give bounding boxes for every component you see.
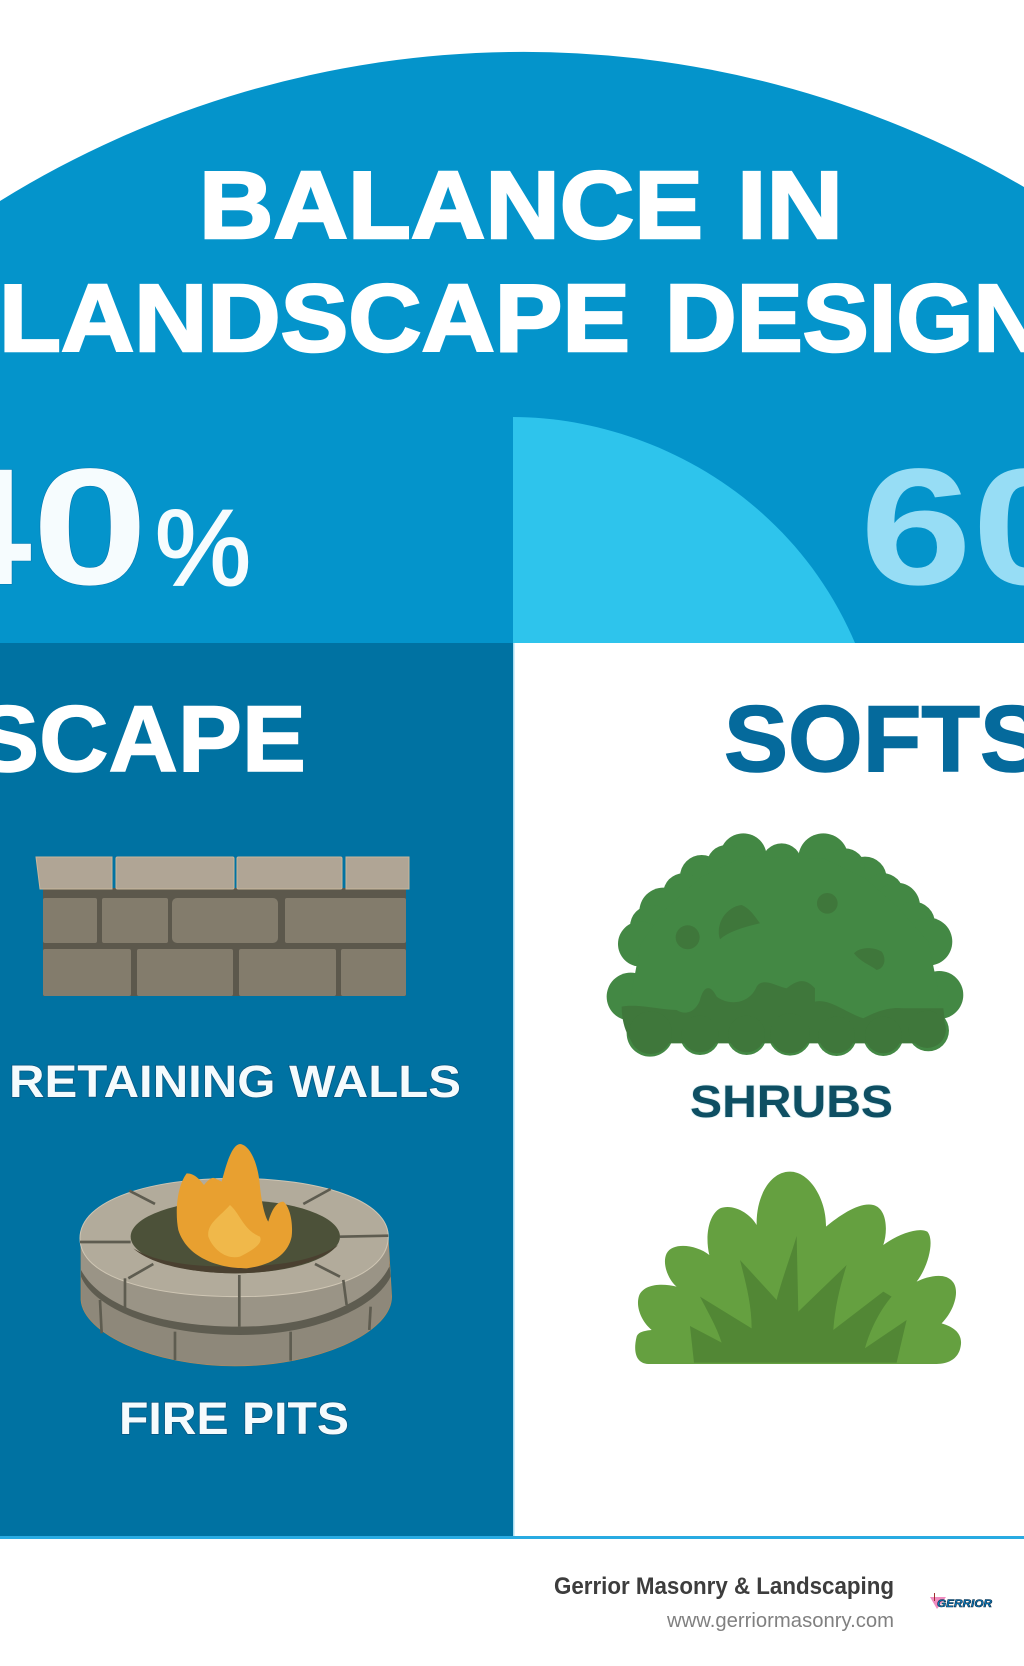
title xyxy=(0,152,1024,372)
footer xyxy=(554,1573,992,1632)
title: DESIGN xyxy=(665,265,1024,372)
stat: 40 percent xyxy=(0,435,251,620)
icon: retaining wall xyxy=(36,857,409,996)
label: shrubs: SHRUBS xyxy=(690,1076,893,1127)
website: www.gerriormasonry.com xyxy=(666,1610,894,1632)
logo: GERRIOR xyxy=(937,1598,992,1610)
panel: hardscape xyxy=(0,643,514,1536)
pie chart: quarter wedge xyxy=(513,417,855,643)
icon: flame xyxy=(177,1144,292,1268)
title: LANDSCAPE xyxy=(0,265,630,372)
title: IN xyxy=(737,152,843,259)
icon: shrub xyxy=(607,833,963,1057)
label: retaining walls: RETAINING WALLS xyxy=(9,1056,461,1107)
icon: fire pit xyxy=(80,1144,392,1366)
logo xyxy=(930,1593,992,1610)
label: fire pits: FIRE PITS xyxy=(119,1393,349,1444)
panel: softscape xyxy=(607,686,1024,1364)
company name: Gerrior Masonry & Landscaping xyxy=(554,1573,894,1600)
icon: ornamental grass bush xyxy=(635,1172,961,1364)
panel: blue dome header xyxy=(0,52,1024,643)
divider line xyxy=(0,1536,1024,1539)
stat: 40 percent: % xyxy=(155,487,251,608)
title: BALANCE xyxy=(199,152,703,259)
